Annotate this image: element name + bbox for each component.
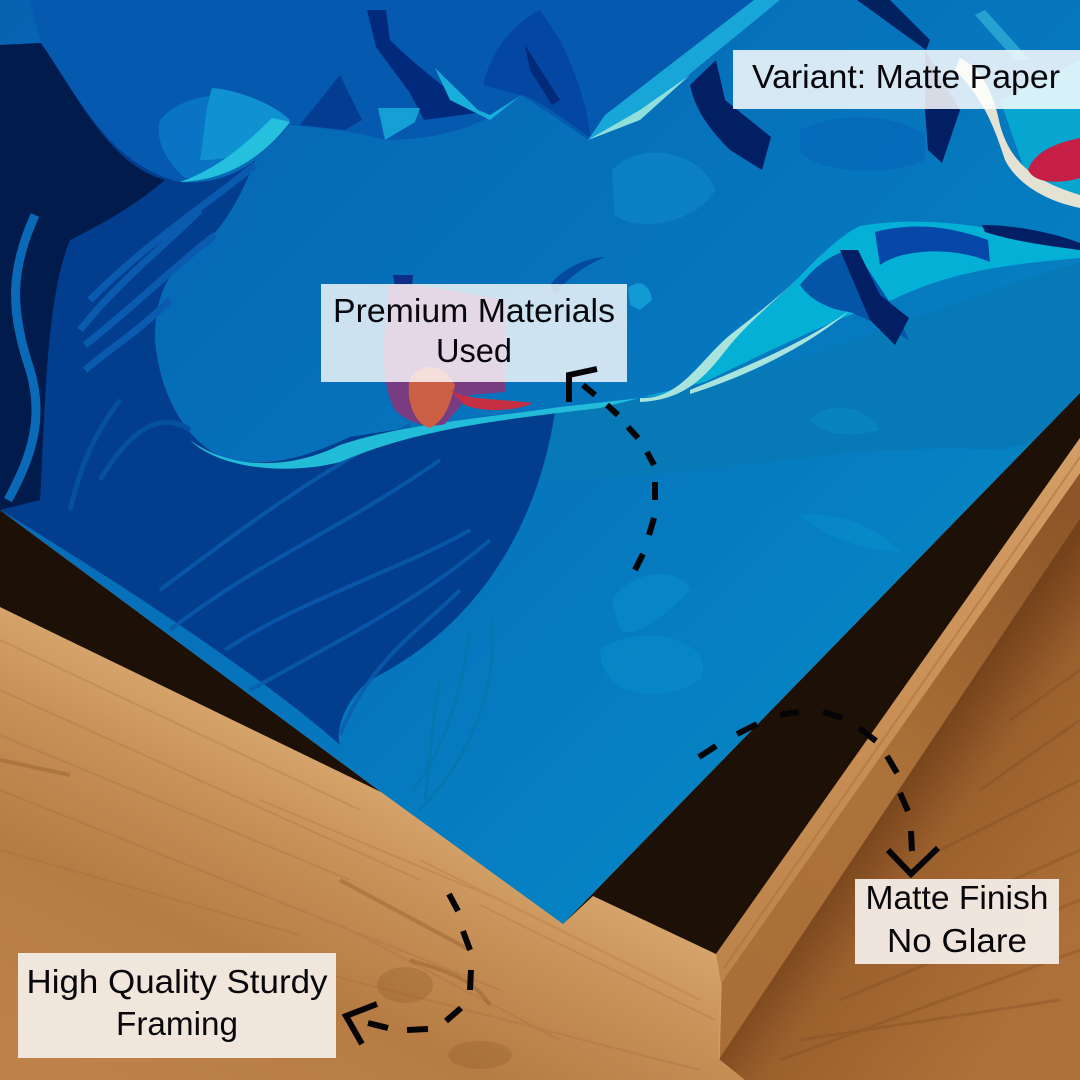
arrow: to Matte Finish [699, 712, 938, 874]
print art: dark navy hair [0, 43, 165, 510]
print art: lips [384, 275, 533, 428]
label: Premium Materials Used: Premium Materials [333, 293, 615, 330]
print art: jaw shadow band [604, 262, 1080, 478]
dark frame interior [0, 393, 1080, 954]
label: Matte Finish No Glare: Matte Finish [866, 880, 1048, 917]
label: Matte Finish No Glare: No Glare [887, 923, 1027, 960]
print art: right-hand face with cream line and red lip [955, 58, 1080, 208]
label: Variant [733, 50, 1080, 109]
print art: nose [367, 10, 520, 140]
print art: flowing teal line and lower eye [640, 222, 1080, 402]
arrow: to High Quality Framing [346, 894, 471, 1044]
label: Variant: Variant: Matte Paper [752, 59, 1060, 96]
label: Premium Materials Used [321, 284, 627, 382]
print art: lower lip rim [190, 398, 640, 469]
print art: upper eye and cheek [483, 0, 1030, 310]
label: Matte Finish No Glare [855, 879, 1059, 964]
label: Premium Materials Used: Used [436, 333, 512, 370]
label: High Quality Sturdy Framing: High Quality Sturdy [26, 964, 328, 1001]
floor right of frame [719, 518, 1080, 1080]
label: High Quality Sturdy Framing: Framing [116, 1006, 238, 1043]
arrow: to Premium Materials [569, 369, 655, 570]
print art: lower neck highlights [600, 408, 900, 694]
picture frame: right rail [716, 438, 1080, 1059]
print art: hair mass [0, 43, 555, 745]
label: High Quality Sturdy Framing [18, 953, 336, 1058]
print art: hair strands [8, 165, 493, 811]
print art: chin fold [30, 0, 780, 182]
